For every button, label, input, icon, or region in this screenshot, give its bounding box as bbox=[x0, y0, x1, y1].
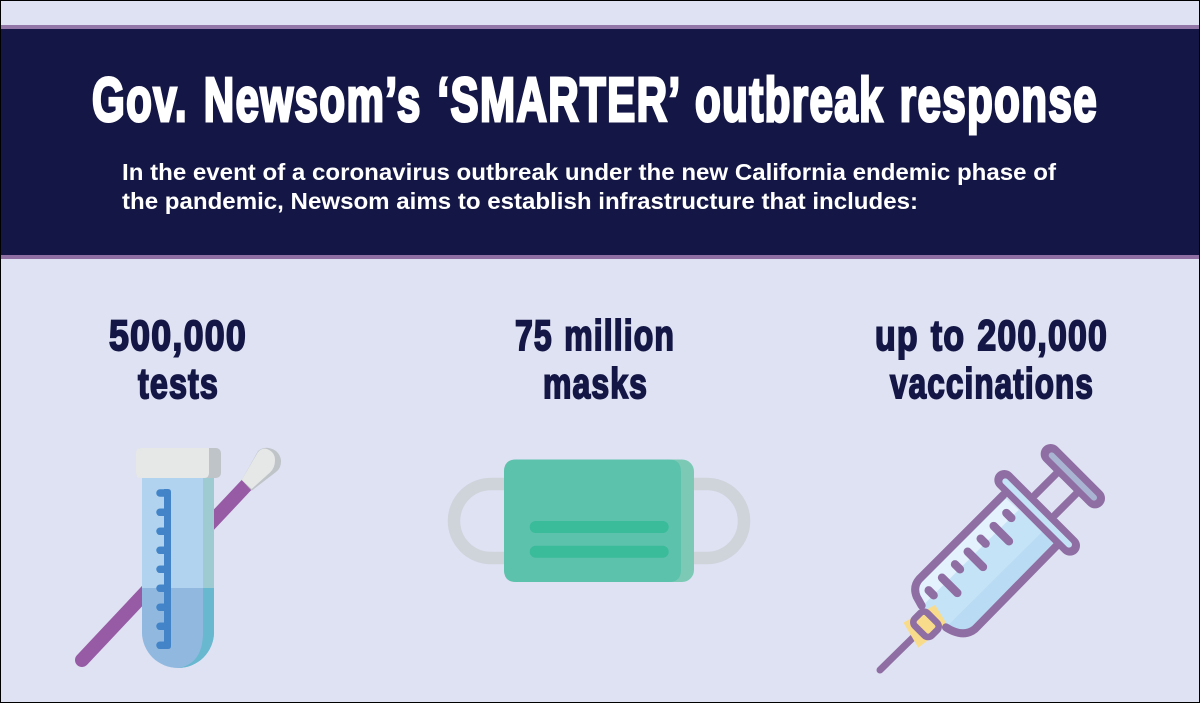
stat: up to 200,000 vaccinations: up to 200,000 bbox=[875, 312, 1108, 360]
icon: test tube and swab bbox=[82, 448, 281, 668]
icon: syringe bbox=[880, 454, 1095, 670]
stat: 500,000 tests: tests bbox=[138, 360, 219, 408]
intro text: the pandemic, Newsom aims to establish infrastructure that includes: bbox=[122, 188, 918, 214]
stat: up to 200,000 vaccinations bbox=[875, 312, 1108, 408]
header banner bbox=[0, 25, 1200, 259]
stat: up to 200,000 vaccinations: vaccinations bbox=[890, 360, 1094, 408]
stat: 75 million masks bbox=[515, 312, 675, 408]
icon: face mask bbox=[454, 460, 744, 582]
intro text: In the event of a coronavirus outbreak under the new California endemic phase of bbox=[122, 159, 1056, 185]
intro text bbox=[122, 159, 1056, 214]
stat: 75 million masks: masks bbox=[543, 360, 648, 408]
stat: 500,000 tests bbox=[109, 312, 247, 408]
stat: 500,000 tests: 500,000 bbox=[109, 312, 247, 360]
stat: 75 million masks: 75 million bbox=[515, 312, 675, 360]
